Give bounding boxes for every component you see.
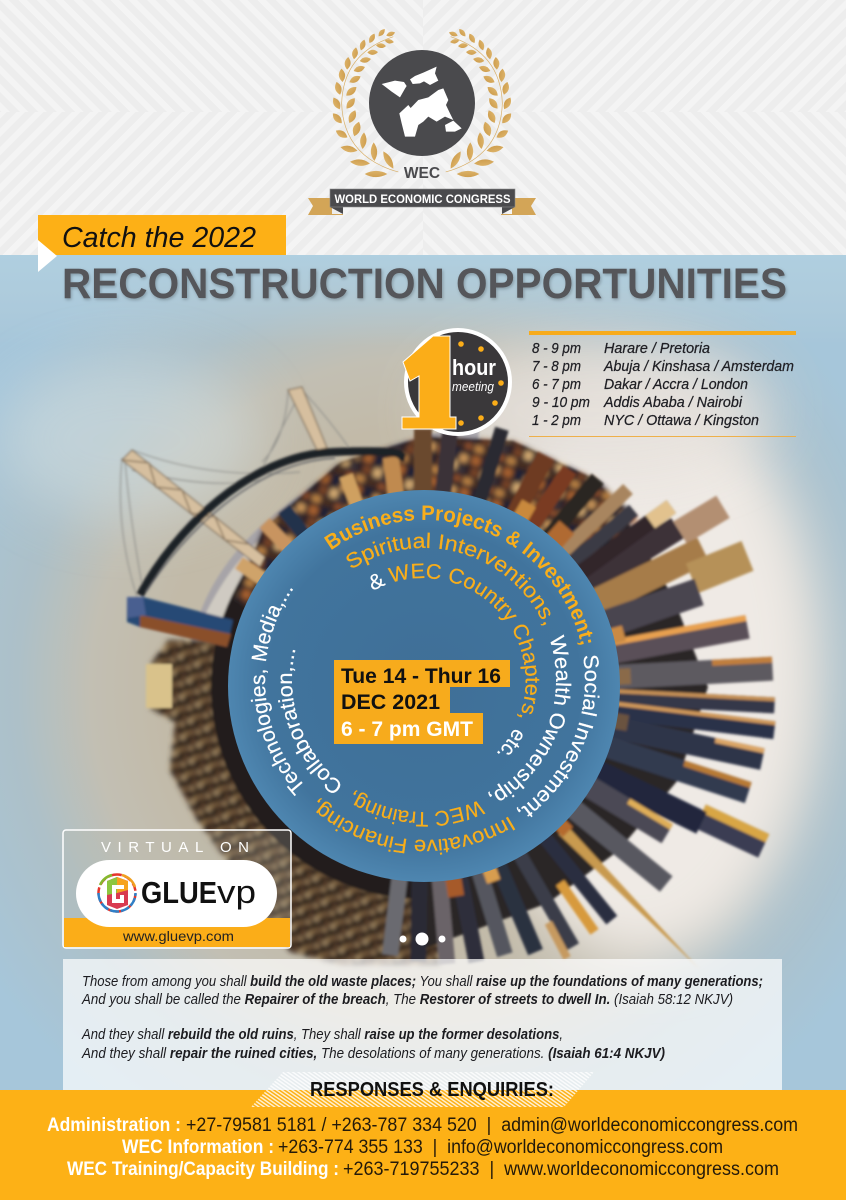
date box bbox=[334, 660, 510, 744]
carousel dots bbox=[400, 932, 446, 946]
hour label: hour bbox=[452, 355, 496, 380]
planet city illustration bbox=[120, 387, 775, 974]
date line 2: DEC 2021 bbox=[341, 691, 440, 714]
row Dakar: Dakar / Accra / London bbox=[604, 376, 748, 393]
Isaiah 61:4 text: And they shall repair the ruined cities, The desolations of many generations. (Isaiah 61:4 NKJV) bbox=[81, 1045, 665, 1062]
laurel wreath bbox=[331, 28, 513, 177]
row Abuja bbox=[532, 358, 794, 375]
row Harare: 8 - 9 pm bbox=[532, 340, 581, 357]
GLUE icon bbox=[96, 872, 138, 914]
row Harare: Harare / Pretoria bbox=[604, 340, 710, 357]
clock dots bbox=[458, 341, 504, 426]
time zone table bbox=[529, 331, 796, 437]
tan tower on left bbox=[146, 664, 172, 708]
WEC label: WEC bbox=[404, 165, 440, 182]
row Addis Ababa bbox=[532, 394, 743, 411]
sky background photo bbox=[0, 255, 846, 1091]
responses heading: RESPONSES & ENQUIRIES: bbox=[310, 1079, 554, 1101]
middle spiral: WEC training: WEC Training, bbox=[353, 790, 486, 827]
inner spiral: ampersand: & bbox=[370, 574, 386, 590]
headline tag: Catch the 2022: Catch the 2022 bbox=[62, 222, 256, 254]
row Addis Ababa: 9 - 10 pm bbox=[532, 394, 590, 411]
virtual on GLUEvp panel bbox=[63, 830, 291, 948]
bridge deck block bbox=[127, 597, 233, 647]
ribbon banner: WORLD ECONOMIC CONGRESS bbox=[334, 194, 511, 206]
Isaiah 58:12 text bbox=[81, 973, 763, 1008]
row NYC: 1 - 2 pm bbox=[532, 412, 581, 429]
GLUEvp wordmark: GLUE bbox=[141, 875, 217, 910]
Isaiah 58:12 text: And you shall be called the Repairer of the breach, The Restorer of streets to dwell In. (Isaiah 58:12 NKJV) bbox=[81, 991, 733, 1008]
haze hills behind bridge bbox=[190, 425, 480, 650]
virtual on GLUEvp panel: vp bbox=[217, 874, 256, 910]
radial buildings bbox=[211, 426, 775, 974]
WEC information line: WEC Information : bbox=[122, 1137, 274, 1158]
main title: RECONSTRUCTION OPPORTUNITIES bbox=[62, 260, 787, 308]
large numeral 1 bbox=[402, 336, 456, 429]
white pill bbox=[76, 860, 277, 927]
middle spiral: collaboration: Collaboration,... bbox=[278, 650, 340, 793]
row Addis Ababa: Addis Ababa / Nairobi bbox=[603, 394, 743, 411]
Isaiah 61:4 text: And they shall rebuild the old ruins, They shall raise up the former desolations, bbox=[81, 1026, 563, 1043]
WEC training line: WEC Training/Capacity Building : bbox=[67, 1159, 339, 1180]
meeting label: meeting bbox=[452, 380, 494, 394]
row NYC bbox=[532, 412, 759, 429]
row Abuja: Abuja / Kinshasa / Amsterdam bbox=[603, 358, 794, 375]
1 hour meeting badge bbox=[402, 330, 510, 434]
row Dakar: 6 - 7 pm bbox=[532, 376, 581, 393]
WEC training line bbox=[67, 1159, 779, 1180]
Isaiah 58:12 text: Those from among you shall build the old waste places; You shall raise up the foundations of many generations; bbox=[82, 973, 763, 990]
Isaiah 61:4 text bbox=[81, 1026, 665, 1062]
website: www.gluevp.com bbox=[122, 928, 234, 944]
outer spiral: social investment: Social Investment, bbox=[516, 656, 600, 818]
scripture panel bbox=[63, 959, 782, 1090]
inner spiral: WEC country chapters: WEC Country Chapters, bbox=[388, 563, 540, 718]
WEC information line: +263-774 355 133 | info@worldeconomiccongress.com bbox=[278, 1137, 723, 1158]
headline tag: Catch the 2022 bbox=[38, 215, 286, 272]
WEC training line: +263-719755233 | www.worldeconomiccongress.com bbox=[343, 1159, 779, 1180]
row Abuja: 7 - 8 pm bbox=[532, 358, 581, 375]
outer spiral: innovative financing: Innovative Financing, bbox=[316, 798, 516, 855]
date line 1: Tue 14 - Thur 16 bbox=[341, 665, 501, 688]
row Dakar bbox=[532, 376, 748, 393]
globe circle with world map bbox=[369, 50, 475, 156]
virtual on label: VIRTUAL ON bbox=[101, 839, 249, 856]
contact footer bbox=[0, 1072, 846, 1200]
row Harare bbox=[532, 340, 710, 357]
bridge arc bbox=[140, 451, 405, 595]
header background: chevron stripes bbox=[0, 0, 846, 256]
logo: World Economic Congress bbox=[308, 28, 536, 215]
middle spiral: wealth ownership: Wealth Ownership, bbox=[488, 634, 572, 800]
middle spiral: spiritual interventions: Spiritual Interventions, bbox=[346, 532, 550, 626]
left speckled city bbox=[150, 640, 440, 965]
ribbon banner bbox=[308, 189, 536, 215]
row NYC: NYC / Ottawa / Kingston bbox=[604, 412, 759, 429]
spiral text ring bbox=[250, 506, 600, 855]
outer spiral: technologies and media: Technologies, Media,... bbox=[250, 588, 303, 796]
bridge towers and cables bbox=[120, 387, 352, 600]
administration line: +27-79581 5181 / +263-787 334 520 | admin@worldeconomiccongress.com bbox=[186, 1115, 798, 1136]
hatched heading tab bbox=[251, 1072, 594, 1107]
administration line: Administration : bbox=[47, 1115, 181, 1136]
time line: 6 - 7 pm GMT bbox=[341, 718, 473, 741]
inner spiral: etc: etc. bbox=[497, 730, 523, 755]
outer spiral line: Business Projects & Investment; bbox=[324, 506, 592, 645]
central blue disc bbox=[228, 490, 620, 882]
